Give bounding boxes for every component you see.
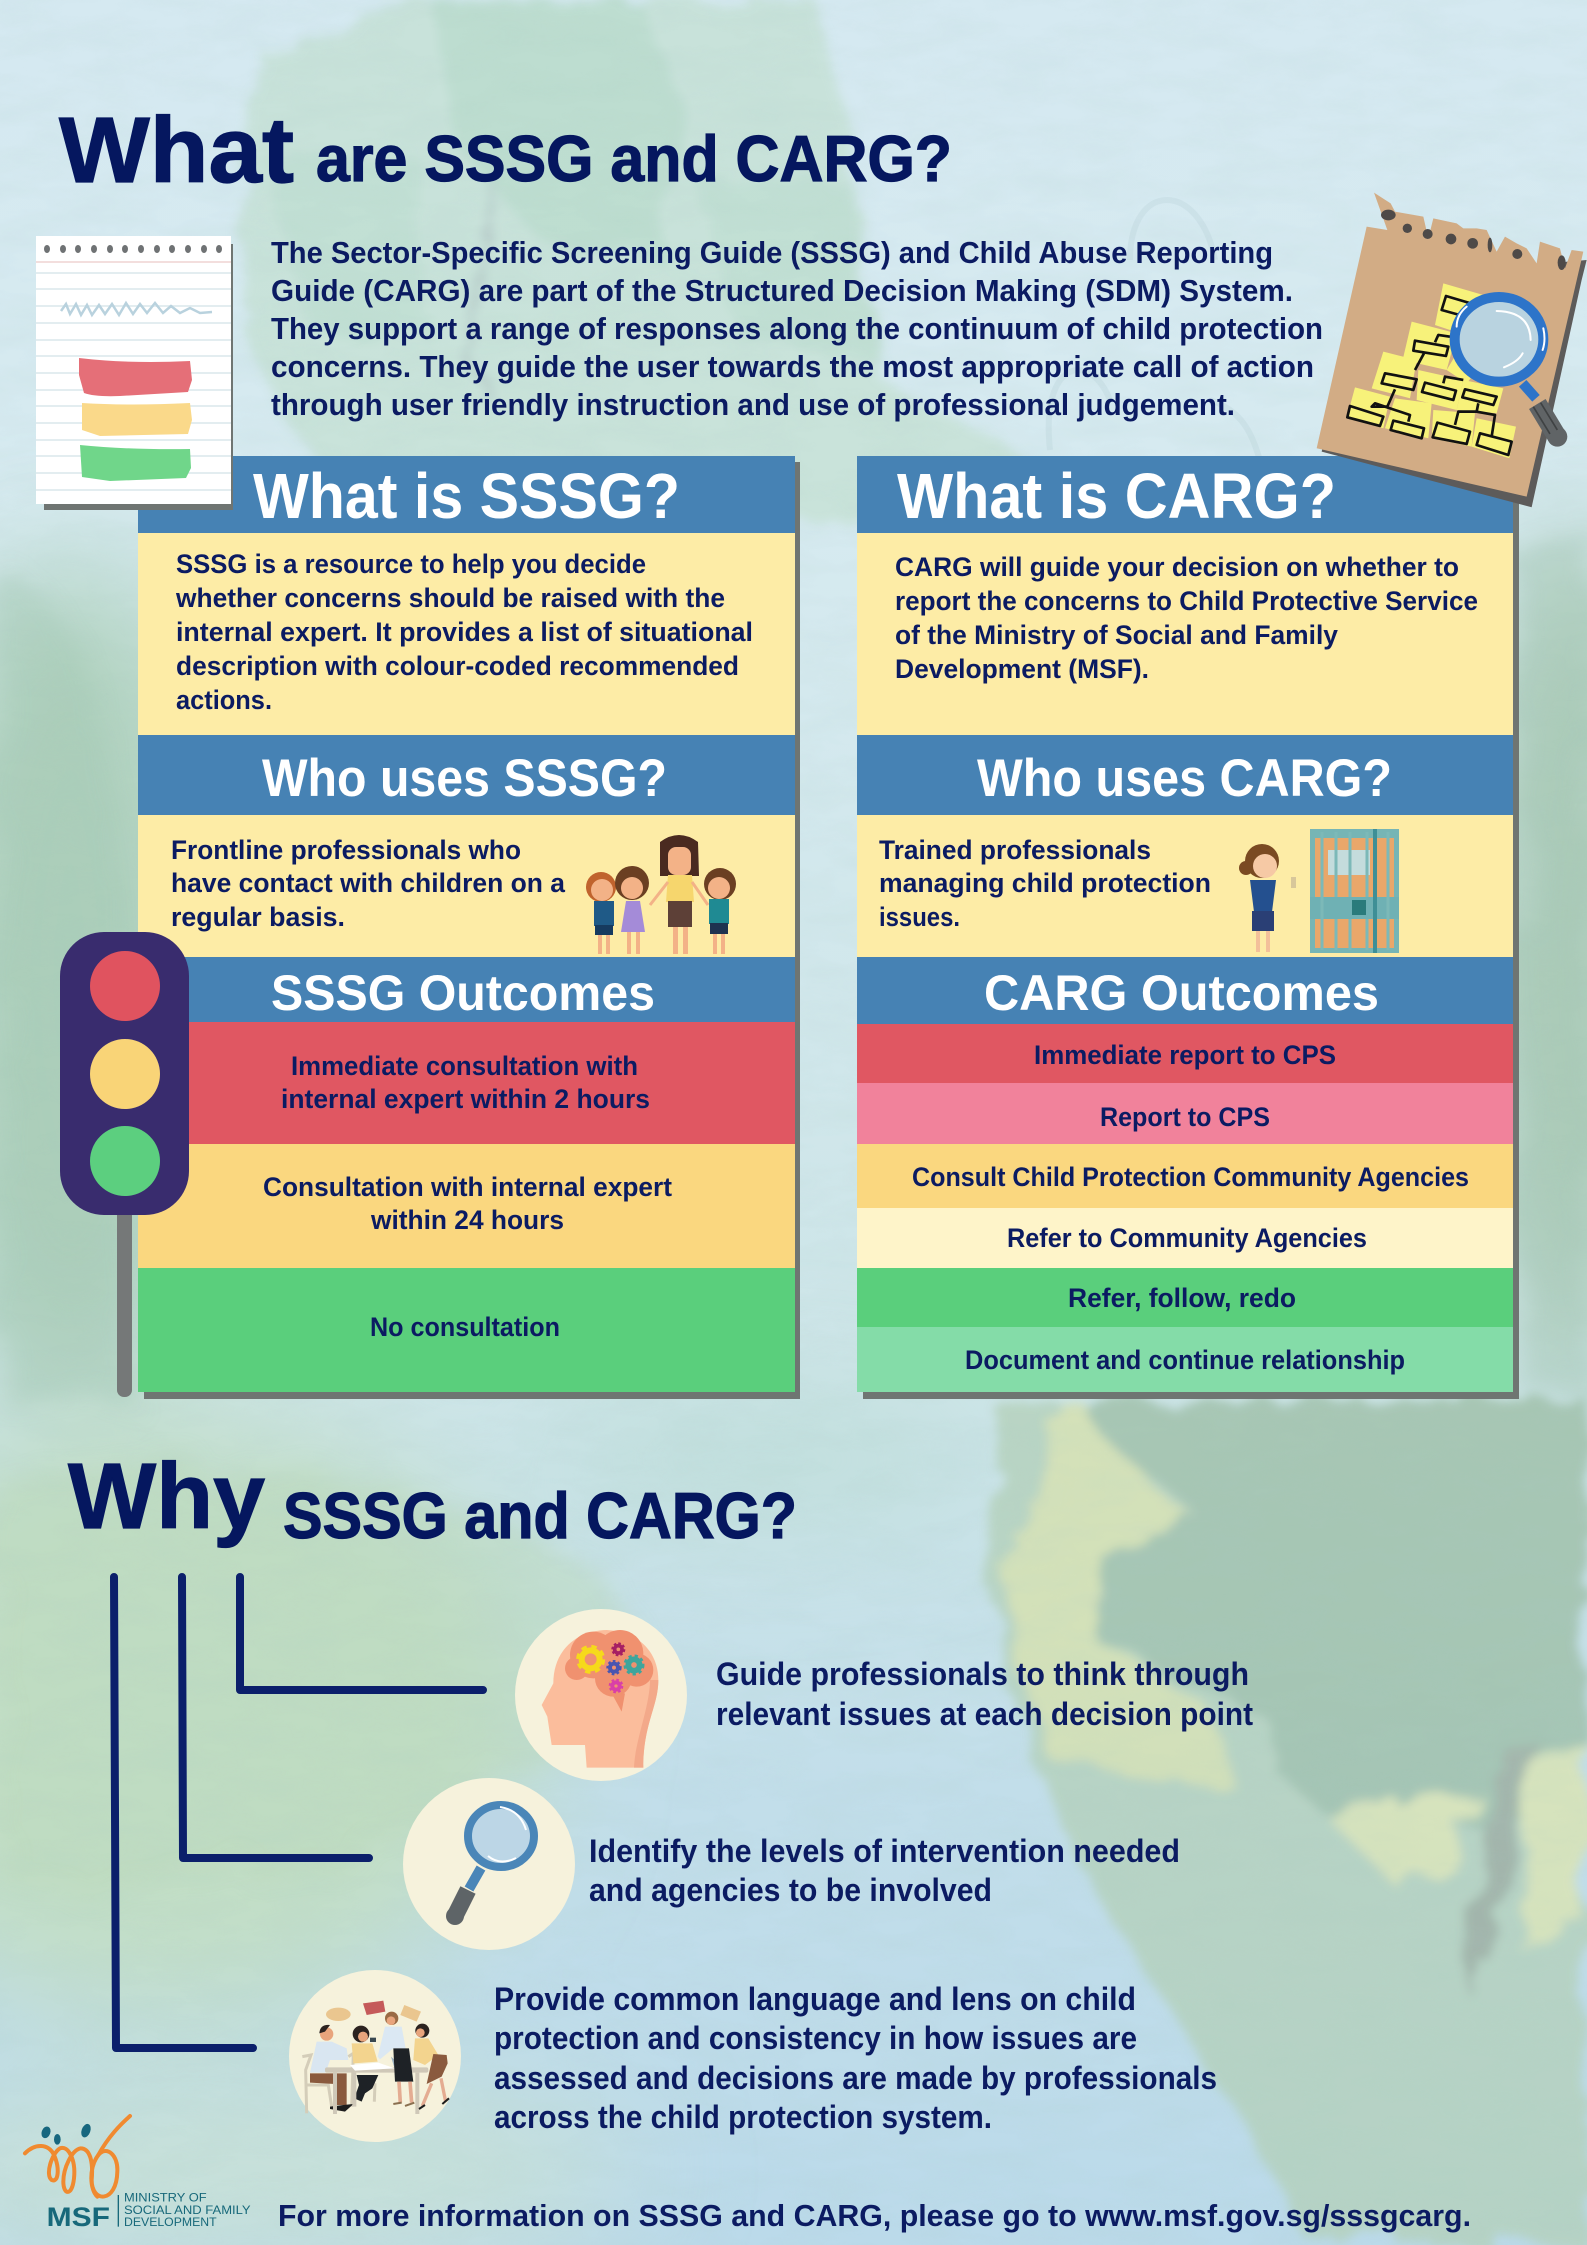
logo: MSF: SOCIAL AND FAMILY xyxy=(124,2203,251,2217)
text: CARG users: managing child protection xyxy=(879,868,1211,898)
intro paragraph: Guide (CARG) are part of the Structured Decision Making (SDM) System. xyxy=(271,273,1293,308)
outcome: red: Immediate consultation with xyxy=(291,1051,638,1081)
text: reason 2: and agencies to be involved xyxy=(589,1872,992,1908)
intro paragraph: concerns. They guide the user towards the most appropriate call of action xyxy=(271,349,1314,384)
text: CARG users: Trained professionals xyxy=(879,835,1151,865)
title: What are SSSG and CARG? xyxy=(59,98,952,202)
outcome: consult xyxy=(857,1144,1513,1208)
cloud outlines xyxy=(994,200,1302,730)
text: CARG users xyxy=(879,835,1211,932)
heading: What is SSSG?: What is SSSG? xyxy=(253,460,680,532)
outcome: report: Report to CPS xyxy=(1100,1102,1270,1132)
intro paragraph: They support a range of responses along the continuum of child protection xyxy=(271,311,1323,346)
outcome: document: Document and continue relationship xyxy=(965,1345,1405,1375)
outcome: amber: within 24 hours xyxy=(370,1205,564,1235)
intro paragraph: through user friendly instruction and use of professional judgement. xyxy=(271,387,1235,422)
heading: SSSG Outcomes: SSSG Outcomes xyxy=(271,965,655,1021)
logo: MSF: MSF xyxy=(47,2202,110,2232)
text: SSSG users xyxy=(171,835,566,932)
text: CARG users: issues. xyxy=(879,902,960,932)
icon: traffic light xyxy=(60,932,189,1397)
heading: Who uses SSSG?: Who uses SSSG? xyxy=(262,749,667,808)
icon: professional at door xyxy=(1239,829,1399,953)
outcome: red: internal expert within 2 hours xyxy=(281,1084,650,1114)
tree at the top xyxy=(240,0,1090,530)
logo: MSF: MINISTRY OF xyxy=(124,2191,207,2205)
text: CARG description: of the Ministry of Social and Family xyxy=(895,620,1338,650)
lower right tree mass xyxy=(989,1400,1587,2245)
icon: teacher and children xyxy=(586,835,736,954)
text: SSSG users: Frontline professionals who xyxy=(171,835,521,865)
outcome: red xyxy=(138,1022,795,1144)
outcome: report xyxy=(857,1083,1513,1144)
text: reason 3: assessed and decisions are made by professionals xyxy=(494,2060,1217,2096)
text: CARG description: Development (MSF). xyxy=(895,654,1149,684)
connector lines xyxy=(114,1577,483,2048)
logo: MSF xyxy=(25,2116,251,2232)
logo: MSF: DEVELOPMENT xyxy=(124,2215,217,2229)
text: SSSG description: internal expert. It provides a list of situational xyxy=(176,617,753,647)
outcome: consult: Consult Child Protection Community Agencies xyxy=(912,1162,1469,1192)
text: reason 1 xyxy=(716,1656,1253,1732)
outcome: refer, follow, redo xyxy=(857,1268,1513,1327)
title: What are SSSG and CARG?: What xyxy=(59,98,294,202)
icon: right notepad with org chart and magnifier xyxy=(1317,193,1587,507)
icon: head with gears xyxy=(515,1609,687,1781)
heading: Who uses CARG?: Who uses CARG? xyxy=(977,749,1392,808)
text: reason 1: Guide professionals to think through xyxy=(716,1656,1249,1692)
text: CARG description xyxy=(895,552,1478,684)
outcome: immediate report xyxy=(857,1024,1513,1083)
text: SSSG users: regular basis. xyxy=(171,902,345,932)
text: reason 3: protection and consistency in how issues are xyxy=(494,2020,1137,2056)
text: reason 1: relevant issues at each decision point xyxy=(716,1696,1253,1732)
outcome: amber: Consultation with internal expert xyxy=(263,1172,672,1202)
text: reason 3: across the child protection system. xyxy=(494,2099,992,2135)
title: What are SSSG and CARG?: are SSSG and CARG? xyxy=(316,122,952,195)
heading: Why SSSG and CARG? xyxy=(68,1444,797,1552)
panel: SSSG xyxy=(138,456,800,1399)
text: reason 2: Identify the levels of intervention needed xyxy=(589,1833,1180,1869)
text: reason 2 xyxy=(589,1833,1180,1908)
outcome: refer, follow, redo: Refer, follow, redo xyxy=(1068,1283,1296,1313)
text: SSSG users: have contact with children on a xyxy=(171,868,566,898)
text: CARG description: report the concerns to Child Protective Service xyxy=(895,586,1478,616)
text: SSSG description: SSSG is a resource to help you decide xyxy=(176,549,646,579)
outcome: refer: Refer to Community Agencies xyxy=(1007,1223,1367,1253)
heading: Why SSSG and CARG?: SSSG and CARG? xyxy=(283,1479,797,1552)
footer text: For more information on SSSG and CARG, please go to www.msf.gov.sg/sssgcarg. xyxy=(278,2198,1471,2233)
text: SSSG description xyxy=(175,549,753,715)
heading: What is CARG?: What is CARG? xyxy=(897,460,1336,532)
text: SSSG description: whether concerns should be raised with the xyxy=(175,583,725,613)
outcome: green: No consultation xyxy=(370,1312,560,1342)
text: SSSG description: description with colour-coded recommended xyxy=(176,651,739,681)
outcome: document xyxy=(857,1327,1513,1392)
text: SSSG description: actions. xyxy=(176,685,272,715)
outcome: green xyxy=(138,1268,795,1392)
outcome: immediate report: Immediate report to CPS xyxy=(1034,1040,1336,1070)
heading: CARG Outcomes: CARG Outcomes xyxy=(984,965,1379,1021)
outcome: refer xyxy=(857,1208,1513,1268)
panel: CARG xyxy=(857,456,1519,1399)
intro paragraph xyxy=(271,235,1323,422)
text: CARG description: CARG will guide your decision on whether to xyxy=(895,552,1459,582)
icon: team meeting xyxy=(289,1970,461,2142)
heading: Why SSSG and CARG?: Why xyxy=(68,1444,265,1548)
icon: magnifier xyxy=(403,1778,575,1950)
text: reason 3 xyxy=(494,1981,1217,2135)
outcome: amber xyxy=(138,1144,795,1268)
text: reason 3: Provide common language and lens on child xyxy=(494,1981,1136,2017)
icon: left notepad with colour swatches xyxy=(36,236,233,510)
intro paragraph: The Sector-Specific Screening Guide (SSSG) and Child Abuse Reporting xyxy=(271,235,1273,270)
